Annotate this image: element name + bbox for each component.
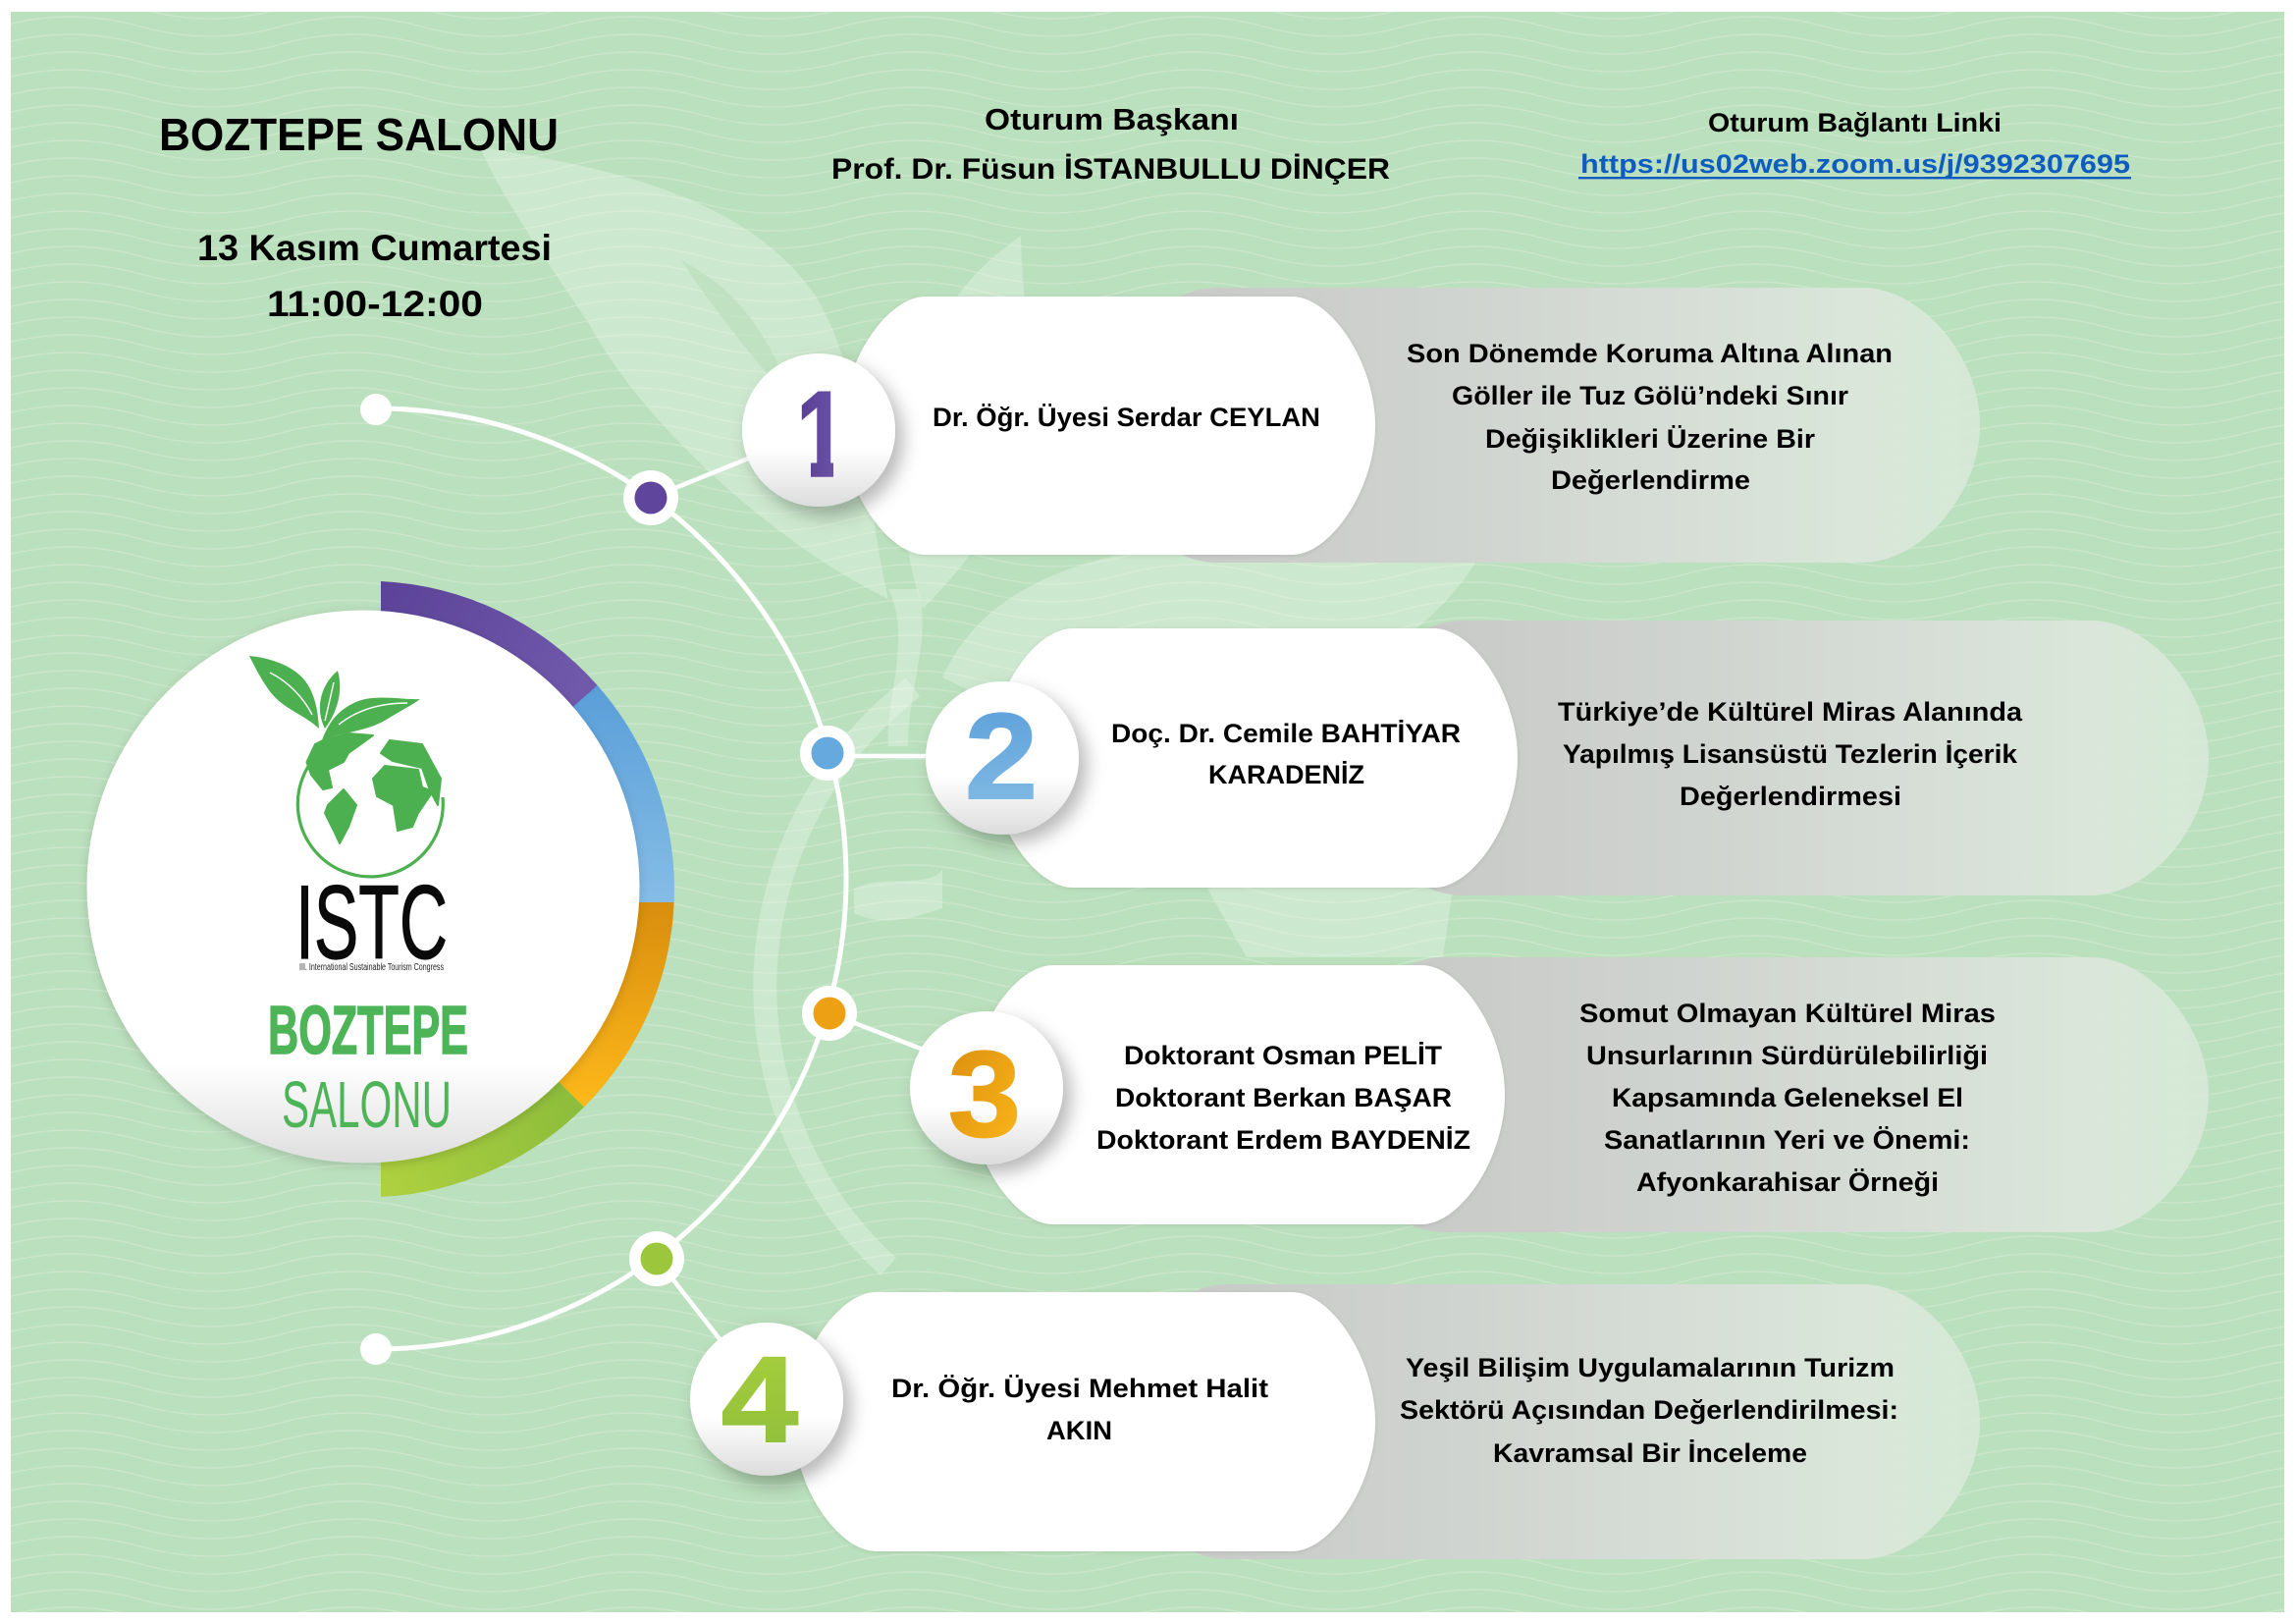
panel 1: speaker — [842, 297, 1375, 555]
panel 4: speaker: AKIN — [1046, 1416, 1112, 1445]
number badge 1: 1 — [796, 367, 847, 503]
node dot: green — [629, 1231, 684, 1286]
panel 4: speaker — [793, 1292, 1375, 1551]
arc start dot — [360, 394, 392, 425]
panel 1: topic: Değerlendirme — [1551, 465, 1750, 495]
panel 1: topic: Göller ile Tuz Gölü’ndeki Sınır — [1452, 381, 1849, 410]
panel 1: topic — [1099, 288, 1980, 563]
panel 3: speaker — [970, 965, 1505, 1224]
panel 2: topic: Yapılmış Lisansüstü Tezlerin İçerik — [1563, 739, 2018, 769]
background watermark: leaves and globe — [480, 147, 1492, 1267]
node dot: orange — [802, 986, 857, 1041]
number badge 2 — [926, 681, 1079, 835]
panel 3: speaker: Doktorant Osman PELİT — [1124, 1041, 1443, 1070]
panel 3: topic: Unsurlarının Sürdürülebilirliği — [1586, 1041, 1988, 1070]
panel 3: speaker: Doktorant Erdem BAYDENİZ — [1096, 1125, 1470, 1155]
panel 1: topic: Değişiklikleri Üzerine Bir — [1485, 424, 1816, 454]
session chair: Prof. Dr. Füsun İSTANBULLU DİNÇER — [831, 153, 1390, 186]
panel 2: topic — [1345, 621, 2209, 895]
panel 2: speaker — [989, 628, 1518, 888]
panel 4: speaker: Dr. Öğr. Üyesi Mehmet Halit — [891, 1374, 1268, 1403]
session date and time: 11:00-12:00 — [267, 284, 483, 324]
session chair: Oturum Başkanı — [985, 102, 1239, 136]
logo wordmark: ISTC — [295, 863, 448, 981]
logo wordmark — [295, 863, 448, 981]
panel 4: topic: Kavramsal Bir İnceleme — [1493, 1438, 1807, 1468]
panel 2: speaker: KARADENİZ — [1208, 760, 1364, 789]
number badge 4: 4 — [721, 1332, 798, 1468]
panel 4: topic — [1110, 1284, 1980, 1559]
panel 2: topic: Değerlendirmesi — [1680, 782, 1901, 811]
number badge 2: 2 — [965, 689, 1038, 825]
panel 3: topic: Afyonkarahisar Örneği — [1636, 1167, 1939, 1197]
badge label: SALONU — [282, 1068, 452, 1142]
session chair — [831, 102, 1390, 186]
badge label: BOZTEPE — [268, 992, 468, 1068]
number badge 4 — [690, 1323, 843, 1476]
panel 2: speaker: Doç. Dr. Cemile BAHTİYAR — [1111, 719, 1461, 748]
panel 3: topic: Somut Olmayan Kültürel Miras — [1579, 999, 1996, 1028]
connector arc — [376, 408, 1001, 1399]
panel 1: topic: Son Dönemde Koruma Altına Alınan — [1407, 339, 1893, 368]
node dot: purple — [623, 470, 678, 525]
logo wordmark: III. International Sustainable Tourism Congress — [299, 962, 444, 973]
panel 4: topic: Sektörü Açısından Değerlendirilmesi: — [1400, 1395, 1898, 1425]
panel 2: topic: Türkiye’de Kültürel Miras Alanında — [1558, 697, 2023, 727]
panel 4: topic: Yeşil Bilişim Uygulamalarının Turizm — [1406, 1353, 1895, 1382]
icon: ISTC globe logo — [249, 656, 443, 877]
number badge 3: 3 — [948, 1027, 1021, 1163]
central badge disc — [86, 611, 640, 1163]
panel 1: speaker: Dr. Öğr. Üyesi Serdar CEYLAN — [933, 403, 1320, 432]
panel 3: speaker: Doktorant Berkan BAŞAR — [1115, 1083, 1452, 1112]
panel 3: topic: Kapsamında Geleneksel El — [1612, 1083, 1963, 1112]
session date and time — [197, 228, 552, 324]
badge label — [268, 992, 468, 1142]
session link — [1578, 108, 2131, 179]
session date and time: 13 Kasım Cumartesi — [197, 228, 552, 268]
number badge 3 — [910, 1011, 1063, 1164]
title: hall name: BOZTEPE SALONU — [159, 109, 559, 160]
node dot: blue — [800, 726, 855, 781]
panel 3: topic — [1327, 957, 2209, 1232]
arc end dot — [360, 1333, 392, 1365]
session link: Oturum Bağlantı Linki — [1708, 108, 2002, 137]
central badge ring — [366, 581, 674, 1197]
panel 3: topic: Sanatlarının Yeri ve Önemi: — [1604, 1125, 1970, 1155]
number badge 1 — [742, 353, 895, 507]
session link: https://us02web.zoom.us/j/9392307695 — [1580, 149, 2130, 179]
